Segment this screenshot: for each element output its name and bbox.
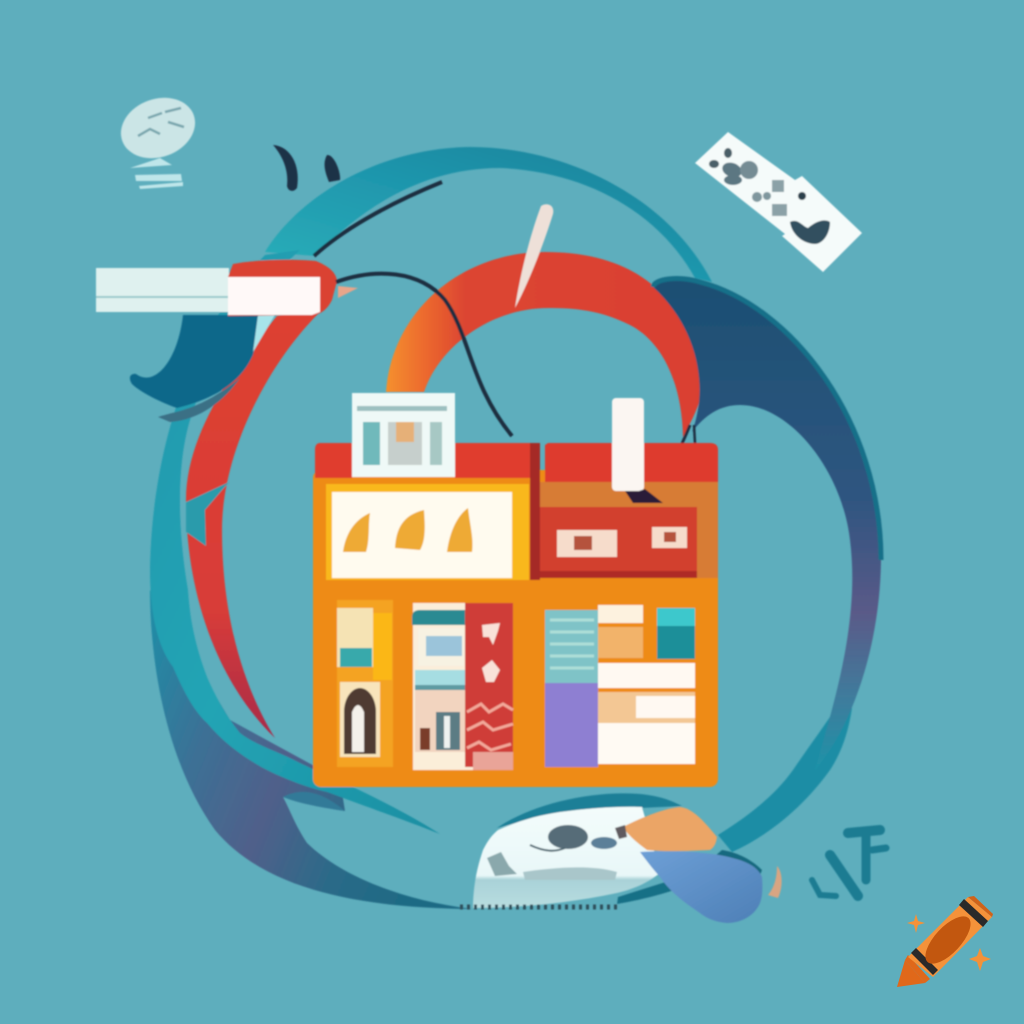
white quill at top of arch [515, 204, 553, 308]
blue bag [640, 851, 762, 923]
red arch [386, 252, 703, 437]
white chimney [612, 398, 663, 503]
artwork [96, 88, 886, 923]
dark divider [530, 443, 540, 580]
orange body [313, 470, 718, 787]
shop window left [337, 600, 393, 767]
white rock, bottom centre [460, 807, 660, 908]
red ring left [186, 310, 322, 738]
shop door centre [412, 603, 513, 770]
teal ring: left side with pointed tip [150, 250, 440, 834]
black marks top [273, 145, 340, 191]
building [313, 393, 718, 787]
tan sliver beside bag [768, 866, 782, 898]
picture frame on roof [352, 393, 455, 477]
thin black wires [314, 182, 697, 482]
icon: tilted paper, top right [695, 132, 862, 272]
dark marks, bottom right [812, 830, 886, 896]
display panel right [545, 605, 695, 767]
red panel right [540, 482, 718, 578]
orange hand [615, 807, 717, 851]
crayon logo [897, 896, 993, 987]
icon: speech bubble with coil, top left [112, 88, 204, 189]
roof red right [545, 443, 718, 482]
outer teal ring: top arc [265, 147, 712, 282]
roof red left [315, 443, 530, 478]
navy swoosh right [653, 279, 881, 770]
outer ring: bottom right stroke [497, 705, 852, 904]
dark swoosh lower left [150, 590, 472, 909]
dark wing under banner [130, 315, 275, 422]
wide sign [326, 484, 529, 580]
pencil banner [96, 260, 358, 316]
